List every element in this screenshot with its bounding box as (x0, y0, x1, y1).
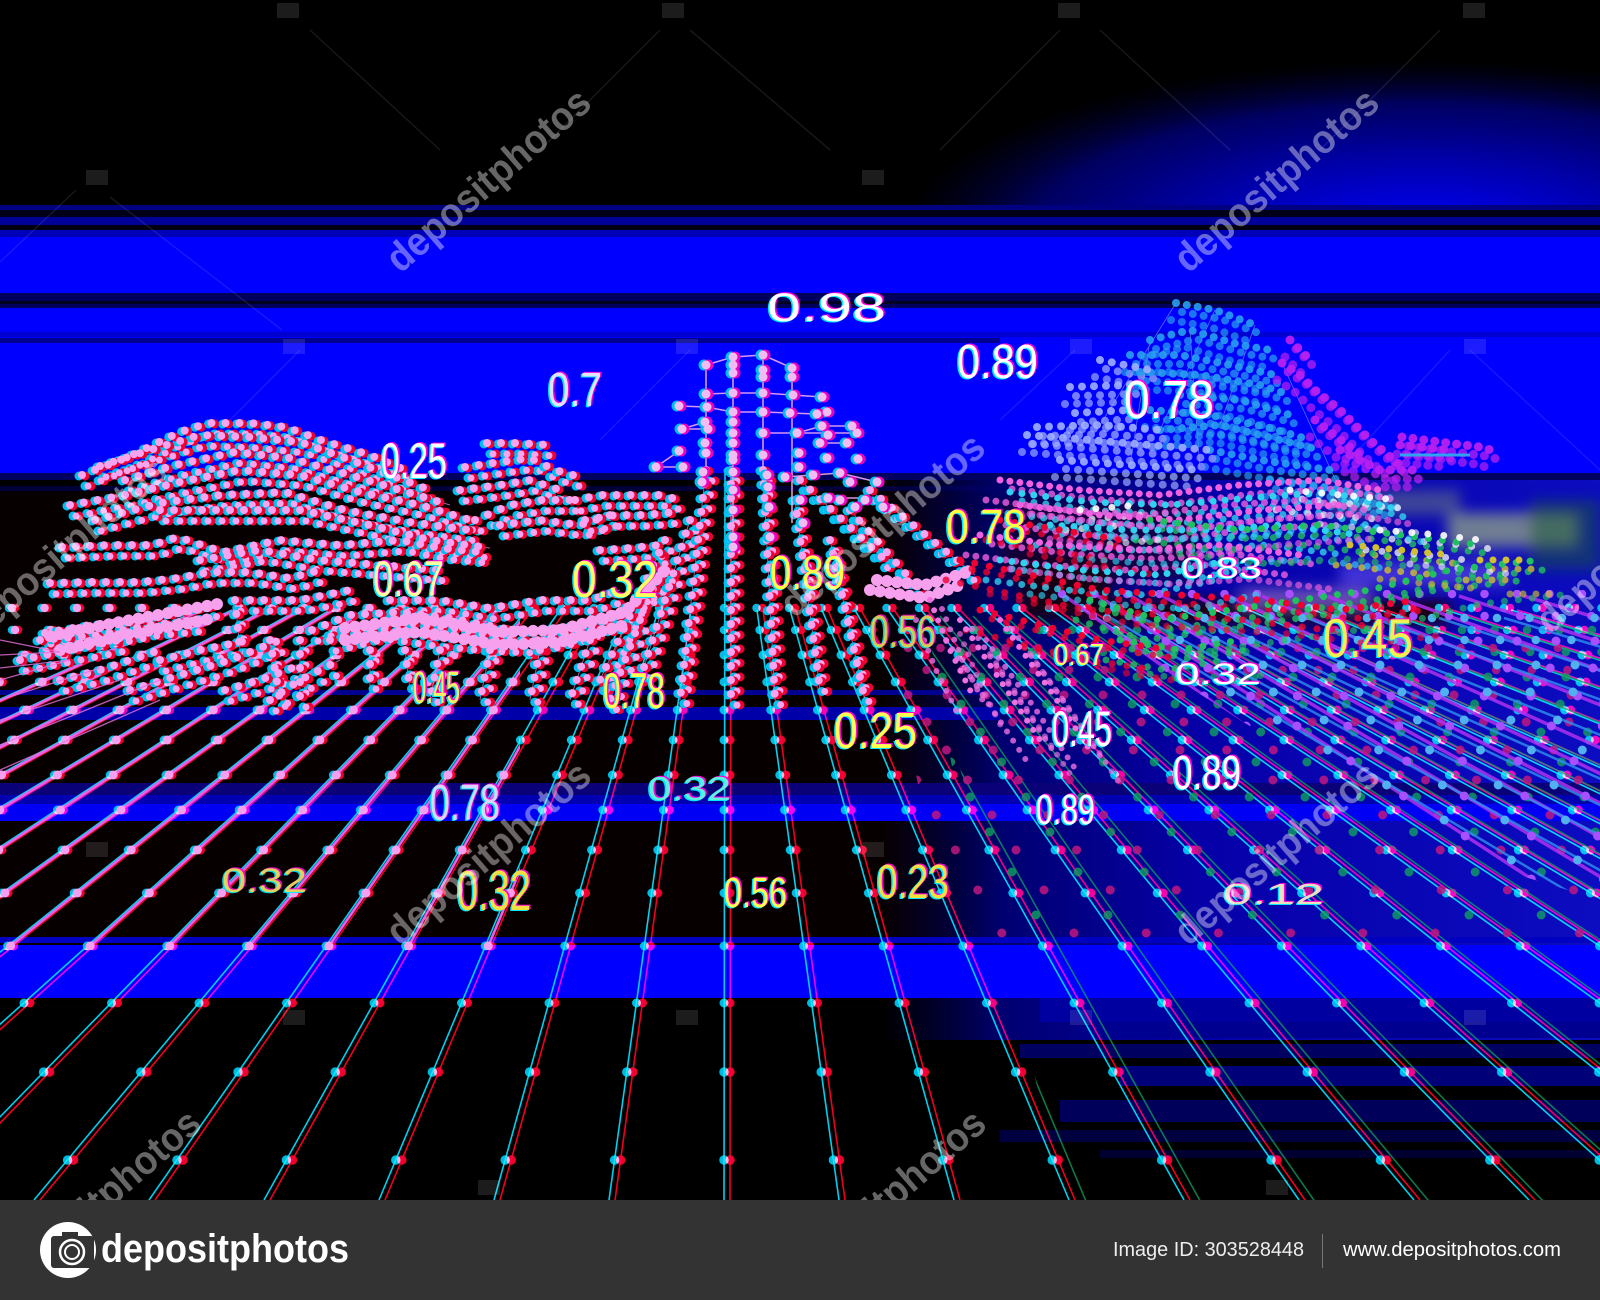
value label: 0.98: 0.98 (767, 286, 886, 330)
depositphotos diagonal watermarks: depositphotos (1165, 80, 1388, 281)
value label: 0.78: 0.78 (1124, 370, 1214, 430)
value label: 0.56: 0.56 (870, 606, 936, 657)
website url: www.depositphotos.com (1342, 1239, 1561, 1261)
value label: 0.32: 0.32 (457, 859, 531, 923)
value label: 0.32: 0.32 (222, 862, 307, 900)
value label: 0.23: 0.23 (877, 856, 949, 909)
depositphotos diagonal watermarks: depositphotos (772, 1101, 995, 1300)
value label: 0.78: 0.78 (603, 663, 665, 719)
value label: 0.25: 0.25 (834, 702, 917, 759)
value label: 0.56: 0.56 (724, 869, 787, 917)
footer bar (0, 1200, 1600, 1300)
value labels (222, 286, 1413, 923)
value label: 0.89: 0.89 (1173, 747, 1241, 800)
value label: 0.67: 0.67 (373, 551, 444, 607)
value label: 0.89: 0.89 (957, 336, 1038, 389)
centre tower of data nodes (654, 355, 885, 547)
icon: camera logo (40, 1222, 96, 1278)
value label: 0.32: 0.32 (648, 770, 731, 807)
value label: 0.32: 0.32 (1175, 658, 1261, 691)
value label: 0.78: 0.78 (946, 501, 1026, 554)
value label: 0.45: 0.45 (413, 662, 460, 713)
right side magenta streak lines (1058, 590, 1600, 890)
value label: 0.83: 0.83 (1181, 552, 1262, 585)
perspective grid: column lines and node rows (0, 470, 1600, 1200)
image id: Image ID: 303528448 (1113, 1239, 1304, 1261)
depositphotos diagonal watermarks: depositphotos (1165, 753, 1388, 954)
value label: 0.7: 0.7 (548, 364, 602, 417)
value label: 0.12: 0.12 (1223, 879, 1324, 911)
value label: 0.45: 0.45 (1323, 607, 1413, 669)
depositphotos diagonal watermarks: depositphotos (771, 425, 994, 626)
value label: 0.89: 0.89 (1036, 786, 1095, 834)
left terrain: pink node cloud (0, 423, 984, 770)
value label: 0.67: 0.67 (1054, 637, 1104, 672)
value label: 0.78: 0.78 (430, 774, 500, 831)
value label: 0.45: 0.45 (1052, 701, 1112, 757)
footer divider (1322, 1234, 1323, 1268)
value label: 0.25: 0.25 (381, 433, 447, 489)
depositphotos diagonal watermarks: depositphotos (377, 753, 600, 954)
logo wordmark: depositphotos (101, 1227, 349, 1271)
value label: 0.32: 0.32 (572, 551, 658, 609)
right terrain: mountain of coloured nodes (916, 303, 1570, 784)
value label: 0.89: 0.89 (770, 547, 845, 600)
depositphotos diagonal watermarks: depositphotos (377, 80, 600, 281)
right side offset green and magenta layer (904, 616, 1600, 1200)
